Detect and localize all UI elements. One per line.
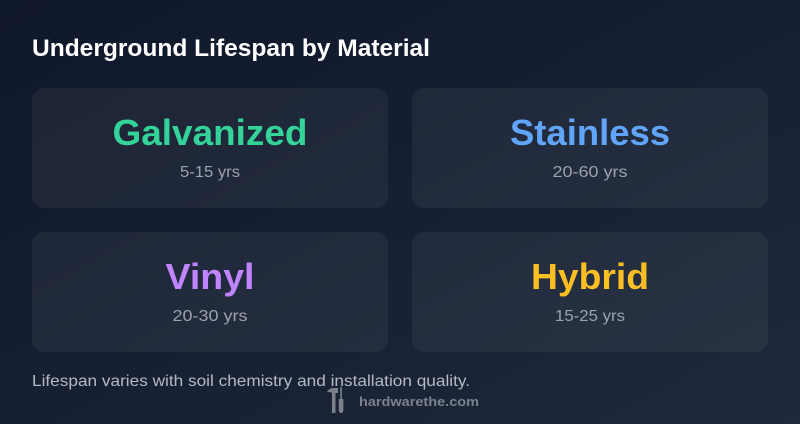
- panel: hybrid: [412, 232, 768, 352]
- panel: galvanized: [32, 88, 388, 208]
- stainless name: Stainless: [510, 112, 670, 153]
- galvanized lifespan: 5-15 yrs: [180, 164, 240, 181]
- vinyl lifespan: 20-30 yrs: [172, 308, 248, 325]
- hybrid name: Hybrid: [531, 256, 649, 297]
- hybrid lifespan: 15-25 yrs: [555, 308, 625, 325]
- footnote: Lifespan varies with soil chemistry and installation quality.: [32, 373, 470, 390]
- galvanized name: Galvanized: [112, 112, 308, 153]
- title: Underground Lifespan by Material: [32, 35, 430, 62]
- panel: stainless: [412, 88, 768, 208]
- stainless lifespan: 20-60 yrs: [552, 164, 628, 181]
- vinyl name: Vinyl: [166, 256, 254, 297]
- watermark: hardwarethe.com: [359, 394, 479, 409]
- icon: hammer and screwdriver: [327, 387, 343, 413]
- panel: vinyl: [32, 232, 388, 352]
